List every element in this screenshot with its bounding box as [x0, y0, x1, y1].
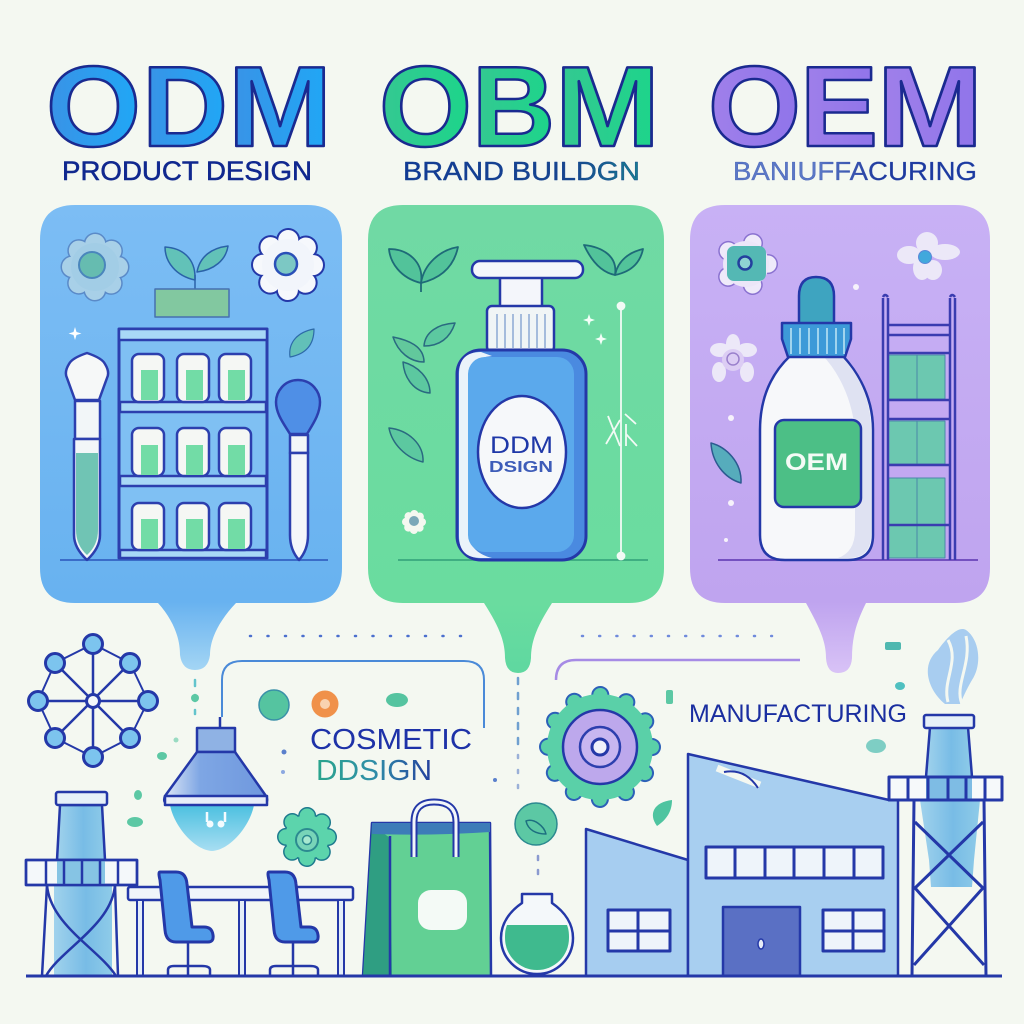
title: OEM [708, 44, 983, 186]
panel: ODM product design [40, 205, 342, 670]
dropper bottle: OEM [785, 449, 848, 476]
icon: flower top-left [723, 241, 769, 287]
bottle shading [825, 358, 871, 558]
label: manufacturing: MANUFACTURING [689, 700, 907, 728]
bottle highlight [459, 352, 492, 558]
smoke wisp [947, 636, 967, 704]
icon: small leaf [290, 329, 314, 357]
label: cosmetic design: DDSIGN [316, 755, 432, 787]
icon: green flower [285, 815, 329, 859]
icon: flower top-right [897, 232, 960, 280]
title: OEM: O [708, 44, 801, 171]
bottle inner panel [468, 357, 574, 552]
icon: left tower [26, 792, 137, 976]
icon: makeup brush right [276, 380, 320, 560]
pump collar [487, 306, 554, 352]
title: ODM: D [142, 44, 228, 171]
pump bottle: DSIGN [489, 459, 553, 476]
panel: OEM manufacturing [690, 205, 990, 673]
shelf with jars [119, 329, 267, 558]
title: OEM: M [877, 44, 983, 171]
pump bottle: DDM [490, 432, 553, 459]
icon: makeup brush left [66, 353, 108, 560]
icon: flower left [71, 243, 119, 291]
panel floor line [398, 559, 648, 561]
subtitle: product design: PRODUCT DESIGN [62, 156, 312, 186]
jar labels [141, 370, 245, 549]
collar ribs [497, 314, 545, 348]
title: ODM: O [46, 44, 141, 171]
title: ODM [46, 44, 332, 186]
icon: shopping bag [363, 802, 491, 976]
icon: small flower [406, 514, 422, 530]
connector line: purple [556, 660, 800, 680]
pump bottle [457, 261, 586, 560]
title: OBM [379, 44, 660, 186]
title: OBM: M [555, 44, 660, 171]
floating specks [127, 642, 905, 827]
rack with green boxes [883, 295, 955, 560]
title: ODM: M [228, 44, 332, 171]
connector line: blue [222, 661, 484, 728]
icon: right tower with smoke [889, 629, 1002, 976]
measurement line [606, 302, 637, 560]
icon: flower right [262, 239, 314, 291]
jars [132, 354, 251, 550]
smoke [928, 629, 978, 704]
lattice [912, 800, 986, 976]
stack [926, 727, 972, 777]
sparkles [583, 314, 607, 345]
icon: flower small [710, 334, 757, 382]
factory door [723, 907, 800, 976]
title: OEM: E [800, 44, 878, 171]
panel: OBM brand building [368, 205, 664, 673]
label: cosmetic design [310, 724, 472, 787]
lower stack [920, 800, 980, 887]
icon: sprout [155, 246, 229, 317]
subtitle: brand building: BRAND BUILDGN [403, 156, 640, 186]
dropper bulb [799, 277, 834, 325]
icon: leaves left side [389, 323, 455, 462]
icon: sparkle [68, 327, 82, 340]
platform [889, 777, 1002, 800]
label: cosmetic design: COSMETIC [310, 724, 472, 756]
dropper bottle [760, 277, 873, 560]
bottle label [775, 420, 861, 507]
pump head [472, 261, 583, 307]
bottle body [457, 350, 586, 560]
ground line [26, 974, 1002, 978]
icon: desk and chairs [128, 872, 353, 976]
subtitle: manufacturing: BANIUFFACURING [733, 156, 977, 186]
icon: factory [586, 754, 898, 976]
icon: small leaf [653, 800, 672, 826]
bottle label [478, 396, 566, 508]
title: OBM: B [472, 44, 555, 171]
icon: three dots [259, 690, 408, 720]
icon: leaves top-left [389, 247, 458, 292]
sparkles [724, 284, 859, 542]
bottle body [760, 356, 873, 560]
icon: hanging lamp [164, 717, 267, 851]
title: OBM: O [379, 44, 472, 171]
dotted connectors [195, 636, 772, 878]
icon: leaf [711, 443, 741, 483]
icon: leaves top-right [584, 245, 643, 275]
icon: leaf circle [515, 803, 557, 845]
dropper collar [782, 323, 851, 357]
factory windows [608, 847, 884, 951]
icon: network wheel [28, 634, 158, 766]
icon: gear [547, 694, 653, 800]
panel floor line [718, 559, 978, 561]
icon: round flask [501, 894, 573, 974]
panel floor line [60, 559, 328, 561]
